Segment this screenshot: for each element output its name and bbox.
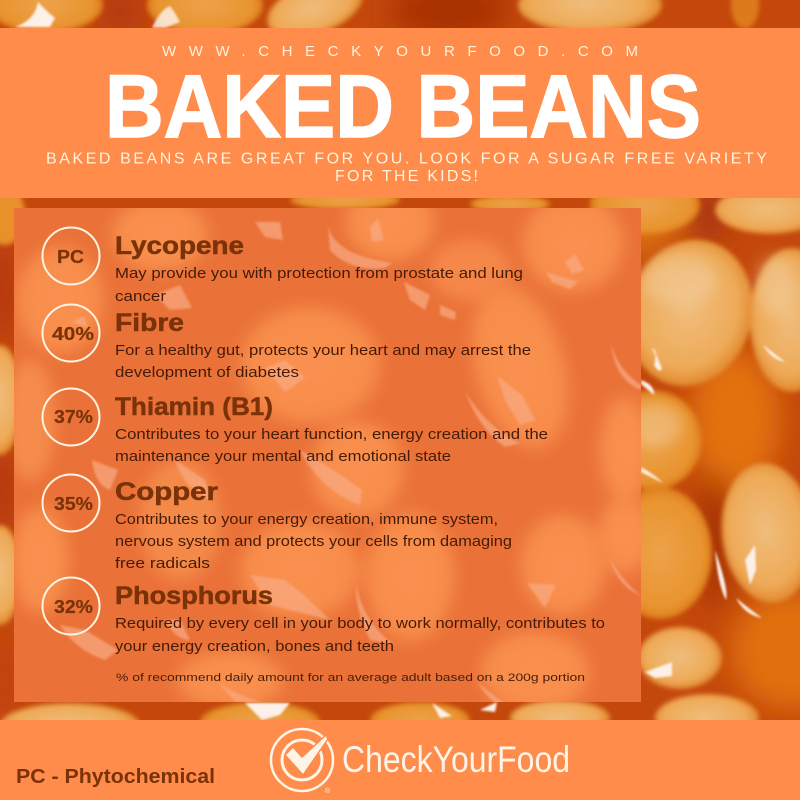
nutrient: Lycopene: cancer bbox=[115, 288, 166, 305]
nutrient: Lycopene bbox=[42, 228, 523, 305]
logo wordmark: CheckYourFood bbox=[342, 739, 570, 780]
nutrient: Fibre: For a healthy gut, protects your heart and may arrest the bbox=[115, 342, 531, 359]
subtitle bbox=[46, 150, 767, 185]
nutrient: Copper bbox=[42, 474, 512, 572]
nutrient: Thiamin: maintenance your mental and emotional state bbox=[115, 448, 451, 465]
nutrient: Phosphorus bbox=[42, 578, 605, 655]
nutrient: Thiamin: Thiamin (B1) bbox=[115, 393, 273, 421]
subtitle: FOR THE KIDS! bbox=[335, 168, 478, 185]
nutrient: Thiamin: Contributes to your heart function, energy creation and the bbox=[115, 426, 548, 443]
footer band bbox=[0, 720, 800, 800]
nutrient: Fibre: 40% bbox=[52, 324, 94, 344]
header band bbox=[0, 28, 800, 198]
nutrient: Fibre: development of diabetes bbox=[115, 364, 299, 381]
panel: translucent nutrient panel bbox=[14, 208, 641, 702]
nutrient: Phosphorus: Required by every cell in your body to work normally, contributes to bbox=[115, 615, 605, 632]
nutrient: Thiamin: 37% bbox=[54, 407, 93, 427]
nutrient: Fibre bbox=[42, 304, 531, 381]
nutrient: Copper: nervous system and protects your cells from damaging bbox=[115, 533, 512, 550]
nutrient: Phosphorus: your energy creation, bones and teeth bbox=[115, 638, 394, 655]
website url: WWW.CHECKYOURFOOD.COM bbox=[162, 43, 638, 60]
icon: CheckYourFood logo bbox=[271, 729, 333, 795]
nutrient: Lycopene: May provide you with protection from prostate and lung bbox=[115, 265, 523, 282]
nutrient: Lycopene: Lycopene bbox=[115, 232, 244, 260]
nutrient: Phosphorus: Phosphorus bbox=[115, 582, 273, 610]
title: BAKED BEANS bbox=[105, 56, 701, 156]
subtitle: BAKED BEANS ARE GREAT FOR YOU. LOOK FOR A SUGAR FREE VARIETY bbox=[46, 150, 767, 168]
nutrient: Lycopene: PC bbox=[57, 247, 84, 267]
nutrient: Thiamin bbox=[42, 388, 548, 465]
footnote: % of recommend daily amount for an average adult based on a 200g portion bbox=[116, 672, 585, 684]
nutrient: Fibre: Fibre bbox=[115, 309, 184, 337]
legend: PC meaning: PC - Phytochemical bbox=[16, 766, 215, 788]
nutrient: Copper: 35% bbox=[54, 494, 93, 514]
nutrient: Phosphorus: 32% bbox=[54, 597, 93, 617]
nutrient: Copper: Copper bbox=[115, 478, 218, 506]
nutrient: Copper: free radicals bbox=[115, 555, 210, 572]
nutrient: Copper: Contributes to your energy creation, immune system, bbox=[115, 511, 498, 528]
icon: CheckYourFood logo: ® bbox=[325, 787, 331, 795]
